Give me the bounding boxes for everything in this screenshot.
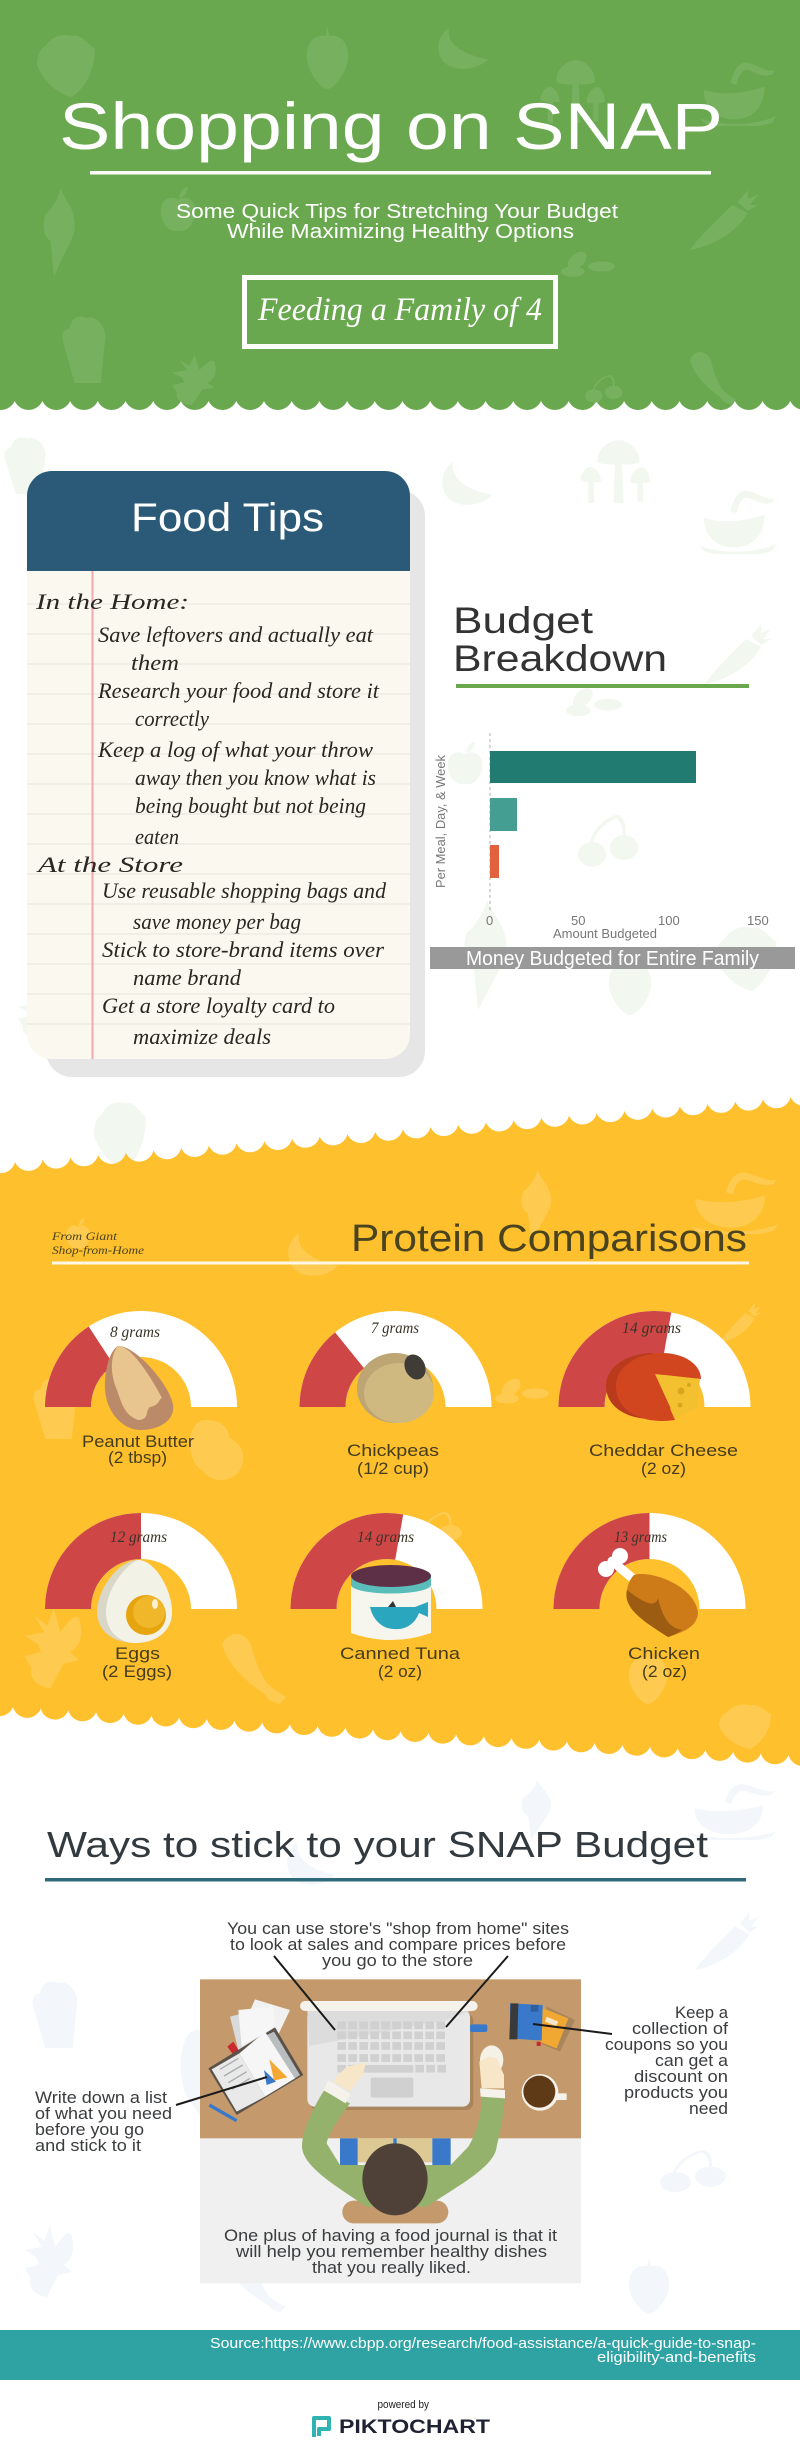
heading: budget breakdown	[453, 600, 749, 688]
title: Shopping on SNAP	[59, 89, 723, 163]
label: (2 oz)	[378, 1662, 422, 1681]
callout: shop from home	[227, 1919, 569, 2030]
chart caption bar: Money Budgeted for Entire Family	[466, 948, 759, 970]
label: Eggs	[115, 1644, 160, 1663]
handwritten tips list: Research your food and store it	[97, 678, 380, 703]
source note: from giant	[51, 1229, 145, 1257]
label: Chickpeas	[347, 1441, 439, 1460]
handwritten tips list: name brand	[133, 965, 242, 990]
handwritten tips list: them	[131, 650, 179, 675]
label	[628, 1644, 700, 1681]
heading: protein comparisons: Protein Comparisons	[351, 1218, 747, 1260]
label: (2 oz)	[641, 1459, 686, 1478]
badge: feeding a family of 4	[244, 278, 556, 346]
heading: ways to stick to your SNAP budget	[45, 1824, 746, 1882]
arrow lines to laptop	[274, 1956, 508, 2030]
label	[82, 1432, 194, 1467]
callout: keep coupons: collection of	[632, 2019, 728, 2038]
icon: tuna can	[351, 1565, 431, 1640]
footer source bar	[0, 2330, 800, 2380]
piktochart logo: PIKTOCHART	[339, 2417, 490, 2438]
background decoration: lower section	[25, 1780, 776, 2314]
gauge: chicken	[554, 1513, 746, 1681]
person	[302, 2045, 505, 2223]
label	[589, 1441, 738, 1478]
panel: food tips notebook	[27, 471, 425, 1077]
icon: boiled egg	[97, 1560, 172, 1643]
gauge: canned tuna	[290, 1513, 482, 1681]
label	[102, 1644, 172, 1681]
illustration: person at desk with laptop	[200, 1979, 581, 2283]
gauge: eggs: 12 grams	[110, 1529, 167, 1546]
icon: laptop	[300, 2001, 487, 2110]
handwritten tips list	[35, 589, 387, 1049]
panel: protein comparisons background	[0, 1095, 800, 1766]
callout: shop from home: you go to the store	[322, 1951, 473, 1970]
gauge: peanut butter	[45, 1311, 237, 1467]
callout: food journal	[224, 2226, 557, 2277]
x-axis ticks: 50	[571, 913, 585, 928]
handwritten tips list: In the Home:	[35, 589, 189, 614]
label: Chicken	[628, 1644, 700, 1663]
icon: coffee cup	[522, 2074, 567, 2111]
icon: chicken drumstick	[598, 1548, 698, 1637]
label: Peanut Butter	[82, 1432, 194, 1451]
source note: from giant: From Giant	[51, 1229, 118, 1243]
label: Cheddar Cheese	[589, 1441, 738, 1460]
icon: peanut butter	[105, 1346, 173, 1430]
badge: feeding a family of 4: Feeding a Family of 4	[257, 292, 542, 328]
gauge: chicken: 13 grams	[614, 1529, 667, 1546]
handwritten tips list: Keep a log of what your throw	[97, 737, 373, 762]
desk	[200, 1979, 581, 2138]
callout: shop from home: to look at sales and compare prices before	[230, 1935, 566, 1954]
icon: piktochart mark	[314, 2418, 329, 2437]
heading: budget breakdown: Budget	[453, 600, 594, 641]
callout: keep coupons	[533, 2003, 729, 2118]
label: (1/2 cup)	[357, 1459, 429, 1478]
callout: keep coupons: discount on	[634, 2067, 728, 2086]
callout: write down a list	[35, 2077, 267, 2155]
callout: shop from home: You can use store's "shop from home" sites	[227, 1919, 569, 1938]
subtitle: Some Quick Tips for Stretching Your Budget	[176, 201, 618, 223]
panel heading: food tips	[27, 471, 410, 571]
x-axis ticks	[486, 913, 769, 928]
footer source bar: eligibility-and-benefits	[597, 2349, 756, 2366]
handwritten tips list: correctly	[135, 706, 209, 731]
x-axis ticks: 0	[486, 913, 493, 928]
callout: write down a list: before you go	[35, 2120, 144, 2139]
callout: keep coupons: Keep a	[675, 2003, 729, 2022]
callout: keep coupons: coupons so you	[605, 2035, 728, 2054]
heading: protein comparisons	[52, 1218, 749, 1264]
handwritten tips list: save money per bag	[133, 909, 301, 934]
panel heading: food tips: Food Tips	[131, 496, 324, 540]
heading: budget breakdown: Breakdown	[453, 638, 667, 679]
label: (2 Eggs)	[102, 1662, 172, 1681]
icon: book and coupons	[509, 2003, 575, 2052]
icon: chickpea	[357, 1351, 434, 1423]
piktochart logo	[314, 2399, 490, 2438]
label	[347, 1441, 439, 1478]
callout: keep coupons: products you	[624, 2083, 728, 2102]
callout: food journal: One plus of having a food journal is that it	[224, 2226, 557, 2245]
bar: per week	[490, 751, 696, 783]
subtitle: While Maximizing Healthy Options	[227, 221, 574, 243]
floor	[200, 2138, 581, 2283]
x-axis ticks: 150	[747, 913, 769, 928]
gauge: eggs	[45, 1513, 237, 1681]
gauge: canned tuna: 14 grams	[357, 1529, 414, 1546]
label	[340, 1644, 461, 1681]
heading: ways to stick to your SNAP budget: Ways to stick to your SNAP Budget	[47, 1824, 708, 1865]
label: Canned Tuna	[340, 1644, 461, 1663]
handwritten tips list: Get a store loyalty card to	[102, 993, 335, 1018]
x-axis ticks: 100	[658, 913, 680, 928]
x-axis label: Amount Budgeted	[553, 926, 657, 941]
gauge: cheddar cheese	[558, 1311, 750, 1478]
background decoration: white section	[4, 437, 776, 1170]
bar chart: money budgeted	[433, 733, 769, 941]
callout: keep coupons: need	[689, 2099, 728, 2118]
icon: cheese wheel	[606, 1353, 701, 1421]
callout: food journal: that you really liked.	[312, 2258, 471, 2277]
bar: per meal	[490, 845, 499, 878]
source note: from giant: Shop-from-Home	[52, 1243, 145, 1257]
handwritten tips list: At the Store	[35, 852, 183, 877]
callout: keep coupons: can get a	[655, 2051, 729, 2070]
callout: write down a list: Write down a list	[35, 2088, 167, 2107]
callout: write down a list: of what you need	[35, 2104, 172, 2123]
gauge: chickpeas	[300, 1311, 492, 1478]
header banner	[0, 0, 800, 410]
footer source bar: Source:https://www.cbpp.org/research/food-assistance/a-quick-guide-to-snap-	[210, 2335, 756, 2352]
y-axis label: Per Meal, Day, & Week	[433, 755, 448, 888]
handwritten tips list: being bought but not being	[135, 793, 366, 818]
subtitle	[176, 201, 618, 243]
handwritten tips list: Stick to store-brand items over	[102, 937, 384, 962]
label: (2 oz)	[642, 1662, 687, 1681]
piktochart logo: powered by	[378, 2399, 429, 2411]
callout: write down a list: and stick to it	[35, 2136, 141, 2155]
label: (2 tbsp)	[108, 1448, 167, 1467]
icon: open notebook and papers	[208, 1999, 303, 2121]
bar: per day	[490, 798, 517, 831]
gauge: peanut butter: 8 grams	[110, 1324, 160, 1341]
handwritten tips list: Use reusable shopping bags and	[102, 878, 387, 903]
handwritten tips list: away then you know what is	[135, 765, 376, 790]
gauge: chickpeas: 7 grams	[371, 1320, 419, 1337]
gauge: cheddar cheese: 14 grams	[622, 1320, 681, 1337]
handwritten tips list: Save leftovers and actually eat	[98, 622, 374, 647]
handwritten tips list: eaten	[135, 824, 179, 849]
callout: food journal: will help you remember healthy dishes	[235, 2242, 547, 2261]
handwritten tips list: maximize deals	[133, 1024, 271, 1049]
